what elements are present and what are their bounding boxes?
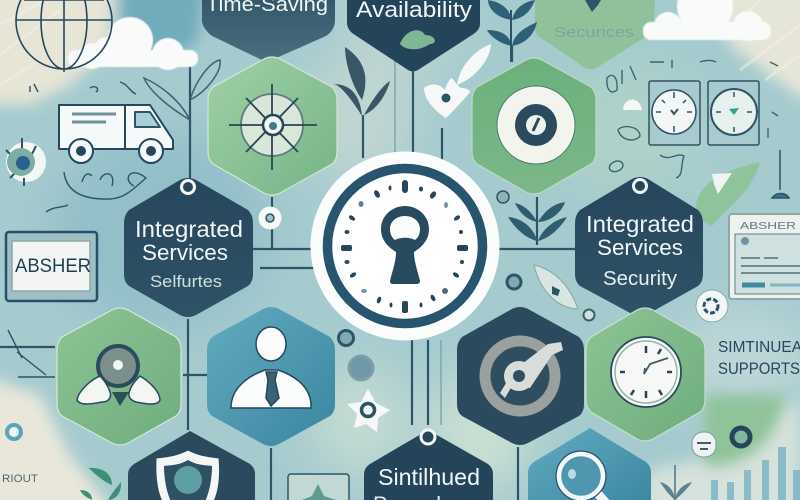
icon: leaf with mark [534, 265, 578, 309]
gauge 2 [708, 81, 759, 145]
icon: gear flower [6, 138, 46, 186]
icon: white flower leaf [424, 44, 491, 118]
small ring: lower [349, 356, 373, 380]
hexagon: shield [128, 431, 255, 500]
text: securtes: Selfurtes [150, 272, 222, 291]
hexagon: target [457, 307, 584, 445]
hexagon: time-saving [202, 0, 335, 61]
heading: integrated: Integrated [135, 216, 243, 242]
icon: recycle badge [497, 191, 509, 203]
plant: bottom center-right sprig [660, 465, 692, 500]
hexagon: magnifier [528, 428, 651, 500]
central dial [310, 152, 500, 340]
hexagon: hands with lens [57, 308, 181, 445]
hexagon: integrated services security [575, 177, 703, 316]
icon: hanging ring [634, 180, 646, 192]
label: out: RIOUT [2, 473, 38, 485]
hexagon: sintihued procedures [364, 430, 493, 500]
text: simtinued supports [718, 339, 800, 378]
small ring: center right [507, 275, 521, 289]
label: securities: Securices [554, 24, 634, 41]
icon: round seal [497, 86, 575, 164]
divider bar [712, 386, 794, 390]
icon: white arrow on leaf [712, 173, 732, 194]
icon: small blue ring bottom left [7, 425, 21, 439]
cloud: top right [643, 0, 771, 41]
icon: small cloud dome [623, 100, 642, 110]
icon: dark leaf mark [582, 0, 604, 12]
plant: dark leaves top [333, 47, 390, 116]
gauge 1 [649, 81, 700, 145]
cloud: top left [68, 17, 198, 70]
bar chart: bottom right [711, 447, 800, 500]
heading: services: Services [597, 235, 683, 260]
decorative scribbles right [607, 60, 778, 178]
icon: pin mark [772, 150, 789, 198]
hexagon: securities [535, 0, 655, 70]
icon: delivery truck [59, 105, 173, 163]
sprout: left stem [144, 60, 220, 120]
hexagon: seal badge [472, 58, 596, 194]
icon: keyhole [381, 206, 429, 284]
icon: round badge right [696, 290, 728, 322]
decorative squiggles left [8, 82, 146, 377]
icon: small ring top left of center [258, 206, 282, 230]
leaf: green right [696, 162, 760, 226]
heading: services: Services [142, 240, 228, 265]
plant: green leaves bottom left [80, 468, 121, 500]
text: security: Security [603, 268, 677, 290]
small ring: right of person [338, 330, 354, 346]
icon: small ring inner [266, 214, 274, 222]
gauges panel [649, 81, 759, 145]
icon: white star flower [347, 389, 390, 432]
plant: small sprig center right [508, 202, 567, 241]
icon: small coin [692, 432, 716, 457]
icon: target with arrow [485, 341, 563, 411]
icon: hanging ring [182, 180, 194, 194]
icon: shield [156, 450, 220, 500]
small ring: near leaf [584, 310, 594, 320]
icon: framed star [288, 474, 349, 500]
label: absher small: ABSHER [740, 221, 796, 232]
icon: lens held in hands [77, 346, 160, 406]
hexagon: clock [586, 308, 705, 441]
icon: globe [16, 0, 112, 72]
icon: person with tie [231, 327, 311, 408]
hexagon: integrated services securtes [124, 178, 253, 317]
heading: sintihued: Sintilhued [378, 464, 480, 490]
hexagon: person [207, 307, 335, 446]
connector lines [0, 0, 580, 500]
icon: green cloud mark [400, 30, 435, 49]
icon: clock face [611, 337, 681, 407]
hexagon: availability [347, 0, 480, 72]
panel: absher browser right [729, 214, 800, 299]
icon: magnifying glass [556, 451, 612, 500]
dial ticks [341, 180, 468, 313]
plant: leaf sprig top [487, 0, 537, 62]
heading: integrated: Integrated [586, 211, 694, 237]
panel: absher sign left [6, 232, 97, 301]
icon: wheel [229, 84, 317, 170]
icon: hanging ring [421, 430, 435, 444]
hexagon: steering wheel [208, 57, 337, 195]
label: absher: ABSHER [15, 256, 91, 277]
icon: ring bottom right [732, 428, 750, 446]
